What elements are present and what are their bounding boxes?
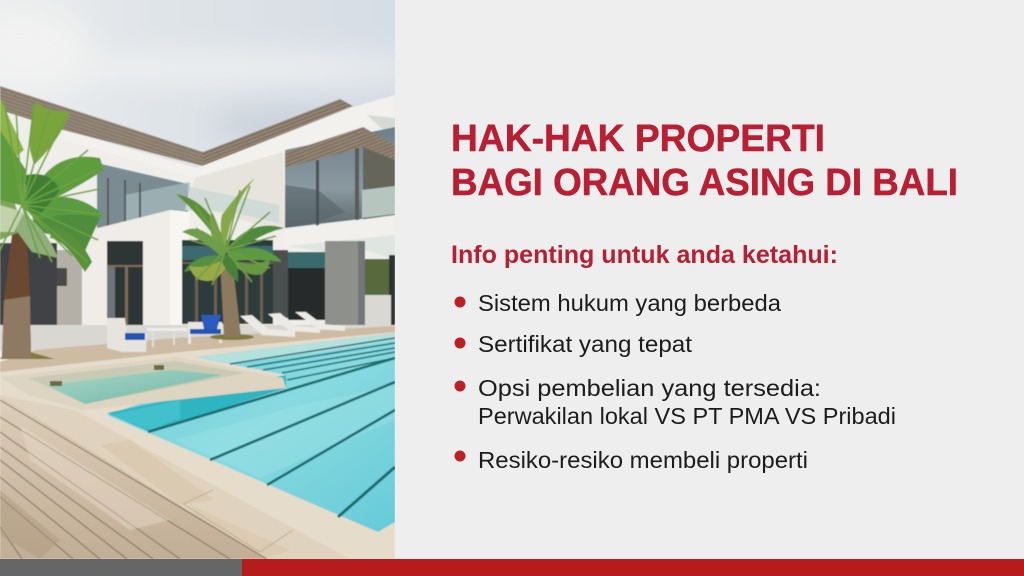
palm: left — [0, 98, 106, 359]
bullet 4: Resiko-resiko membeli properti — [478, 447, 808, 473]
photo: modern villa with swimming pool — [0, 0, 430, 559]
bullet list — [454, 290, 896, 473]
subheading: Info penting untuk anda ketahui: — [451, 241, 838, 269]
dark pillar and right ground windows — [273, 250, 288, 318]
sky — [0, 0, 430, 205]
blue chair — [188, 322, 222, 344]
bullet 2: Sertifikat yang tepat — [478, 331, 693, 357]
bullet 3 — [454, 375, 896, 429]
bullet 1: Sistem hukum yang berbeda — [478, 290, 781, 316]
pool deck stone — [0, 332, 395, 559]
title: HAK-HAK PROPERTI — [451, 118, 825, 160]
house — [0, 86, 395, 330]
bullet 3: Perwakilan lokal VS PT PMA VS Pribadi — [478, 403, 896, 429]
title — [451, 118, 958, 204]
spa plunge pool — [0, 357, 286, 410]
bar: red segment — [242, 559, 1024, 576]
central white block — [98, 210, 188, 228]
upper left window — [97, 163, 188, 228]
palm: right — [176, 178, 284, 340]
upper right window — [285, 127, 395, 228]
slab — [283, 214, 395, 232]
side table — [147, 328, 187, 331]
bottom bar — [0, 559, 1024, 576]
loungers — [240, 312, 345, 337]
swimming pool — [107, 333, 395, 532]
block window — [107, 241, 143, 327]
palm fronds — [0, 98, 104, 272]
outdoor furniture — [107, 312, 345, 352]
bullet 3: Opsi pembelian yang tersedia: — [478, 375, 821, 401]
wooden deck planks — [0, 395, 267, 559]
coping stone joints — [183, 490, 293, 552]
garden behind — [364, 258, 390, 296]
left dark wall — [0, 243, 57, 326]
bar: grey segment — [0, 559, 242, 576]
terrace ground — [0, 325, 395, 378]
white chair — [107, 318, 147, 352]
title: BAGI ORANG ASING DI BALI — [451, 162, 958, 204]
central ground floor windows — [182, 240, 273, 324]
